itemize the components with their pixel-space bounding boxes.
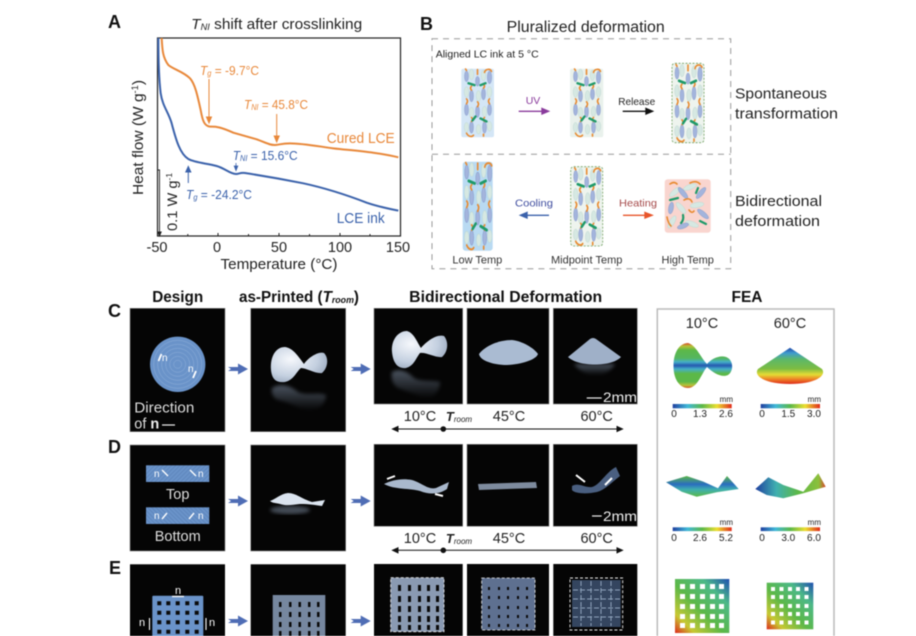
arrow Tg cured [206,79,212,123]
row D [108,437,637,553]
label Tg cured: = -9.7°C [211,63,259,78]
colorbar D 10C: 2.6 [693,533,707,544]
tile: aligned ink [461,69,494,137]
temperature axis C: 10°C [404,409,436,425]
FEA grid 10C [675,579,729,633]
Cooling label: Cooling [515,198,553,210]
colorbar C 10C [671,395,733,420]
x tick labels: -50 [147,240,167,256]
label TNI ink: NI [240,154,248,163]
colorbar C 60C: 0 [759,409,765,420]
design tile D: n [198,511,204,522]
y axis label: Heat flow (W g [130,97,147,195]
temperature axis D: T [446,531,454,546]
colorbar C 10C: 2.6 [719,409,733,420]
design tile E: n [209,617,215,629]
panel letter E: E [109,558,121,578]
temperature axis D: 10°C [404,531,436,547]
label Tg cured: T [200,63,212,78]
scale bar label: -1 [165,172,174,180]
design tile E: n [139,617,145,629]
colorbar D 60C [759,518,821,544]
temperature axis D: 60°C [580,531,613,547]
colorbar C 60C: mm [808,395,821,404]
arrow C1 [228,364,248,374]
column heading: as-Printed: as-Printed (T [239,289,332,306]
colorbar C 60C: 3.0 [807,409,821,420]
label TNI ink: = 15.6°C [247,148,298,163]
FEA frame [657,309,834,636]
column heading: as-Printed: room [332,295,354,305]
design tile C: n [188,364,194,375]
panel letter A: A [108,12,121,32]
curve: Cured LCE [162,38,398,157]
photo D 45C [467,444,549,526]
colorbar C 10C: mm [720,395,733,404]
curve: LCE ink [158,38,398,211]
label deformation: deformation [735,213,820,230]
photo C 10C [374,308,463,404]
colorbar D 60C: 6.0 [807,533,821,544]
FEA heading 10C: 10°C [686,316,718,332]
chart title: shift after crosslinking [210,16,362,33]
panel letter D: D [108,437,121,457]
label Tg cured: g [207,69,212,78]
FEA twist 10C [666,476,739,497]
design tile C: of n [134,416,159,432]
tile: high temp [665,179,711,233]
label Tg ink: T [186,187,198,202]
column heading: Design: Design [152,289,203,306]
x tick labels [147,240,410,256]
arrow Tg ink [186,166,191,183]
column heading: FEA: FEA [732,289,762,306]
label TNI cured: NI [251,103,259,112]
design tile D: n [198,469,204,480]
colorbar D 10C: 0 [671,533,677,544]
label Tg ink: g [193,193,198,202]
temperature axis C: T [446,409,454,424]
dashed frames [432,39,731,269]
panel B: pluralized deformation [420,14,838,269]
caption low temp: Low Temp [452,254,502,266]
aligned ink caption: Aligned LC ink at 5 °C [436,48,539,60]
column heading: as-Printed: ) [354,289,359,306]
tile: midpoint [571,167,603,246]
design tile D: n [154,511,160,522]
colorbar D 10C: 5.2 [719,533,733,544]
colorbar D 10C: mm [720,518,733,527]
design tile D: n [154,469,160,480]
caption high temp: High Temp [662,254,714,266]
FEA saddle 10C [674,343,732,388]
printed photo D [251,445,346,551]
chart title: T [191,16,210,33]
scale bar [158,170,161,236]
label TNI ink: T [233,148,248,163]
temperature axis C: 60°C [580,409,613,425]
panel: FEA [657,309,834,636]
design tile E: n [175,585,181,597]
design tile E [130,564,225,636]
colorbar C 10C: 0 [671,409,677,420]
temperature axis C: 45°C [493,409,525,425]
caption midpoint temp: Midpoint Temp [551,254,622,266]
chart title: NI [201,22,210,32]
design tile C [130,308,225,432]
panel A: DSC chart [108,12,410,273]
colorbar C 60C: 1.5 [781,409,796,420]
arrow E2 [351,616,371,626]
arrow E1 [228,616,248,626]
arrow D2 [351,496,371,506]
Heating arrow [623,212,652,218]
FEA grid 60C [767,583,813,629]
label transformation: transformation [735,105,838,122]
temperature axis C [392,409,622,432]
label spontaneous: Spontaneous [735,85,827,102]
photo C 60C: 2mm [603,390,637,405]
label Cured LCE: Cured LCE [327,131,395,147]
y axis label: -1 [130,85,140,93]
row C [108,301,637,432]
label LCE ink: LCE ink [337,211,385,227]
Release arrow [623,108,652,114]
photo D 10C [374,444,463,526]
arrow TNI ink [234,163,238,170]
colorbar D 60C: mm [808,518,821,527]
x tick labels: 100 [328,240,352,256]
photo D 60C: 2mm [603,509,637,524]
printed photo E [251,564,346,636]
label Tg ink: = -24.2°C [197,187,252,202]
temperature axis D: 45°C [493,531,525,547]
design tile C: n [162,353,168,364]
tile: low temp [463,162,493,251]
colorbar D 10C [671,518,733,544]
tile: released [672,63,704,143]
photo C 60C [553,308,637,405]
x axis label: Temperature (°C) [220,256,338,273]
column heading: Bidirectional Deformation: Bidirectional Deformation [409,289,602,306]
Release label: Release [618,96,655,108]
x tick labels: 0 [213,240,221,256]
plot frame and ticks [158,38,400,236]
FEA twist 60C [755,473,826,498]
photo C 45C [467,308,549,404]
arrow TNI cured [274,114,279,142]
label bidirectional: Bidirectional [735,193,822,210]
panel B title: Pluralized deformation [507,19,665,36]
temperature axis D: room [454,537,472,546]
scale bar label: 0.1 W g [164,183,180,231]
temperature axis C: room [454,415,472,424]
photo E 45C [467,564,549,636]
Heating label: Heating [619,198,657,210]
x tick labels: 150 [386,240,410,256]
label TNI cured: = 45.8°C [258,97,308,112]
x tick labels: 50 [271,240,287,256]
FEA cone 60C [757,348,823,384]
colorbar C 10C: 1.3 [693,409,707,420]
label TNI cured: T [244,97,259,112]
temperature axis D [392,531,622,553]
photo D 60C [553,444,637,526]
printed photo C [251,308,346,432]
colorbar D 60C: 3.0 [781,533,796,544]
colorbar C 60C [759,395,821,420]
arrow C2 [351,364,371,374]
design tile C: Direction [134,400,194,416]
arrow D1 [228,496,248,506]
Cooling arrow [520,212,549,218]
tile: after UV [570,69,603,137]
design tile D: Top [166,487,189,503]
row E [109,558,637,636]
photo E 10C [374,564,463,636]
panel letter C: C [108,301,121,321]
design tile D [130,445,225,551]
panel letter B: B [420,14,433,34]
photo E 60C [553,564,637,636]
design tile D: Bottom [155,529,201,545]
UV label: UV [526,95,540,107]
colorbar D 60C: 0 [759,533,765,544]
y axis label: ) [130,80,147,85]
FEA heading 60C: 60°C [774,316,806,332]
UV arrow [519,108,548,114]
